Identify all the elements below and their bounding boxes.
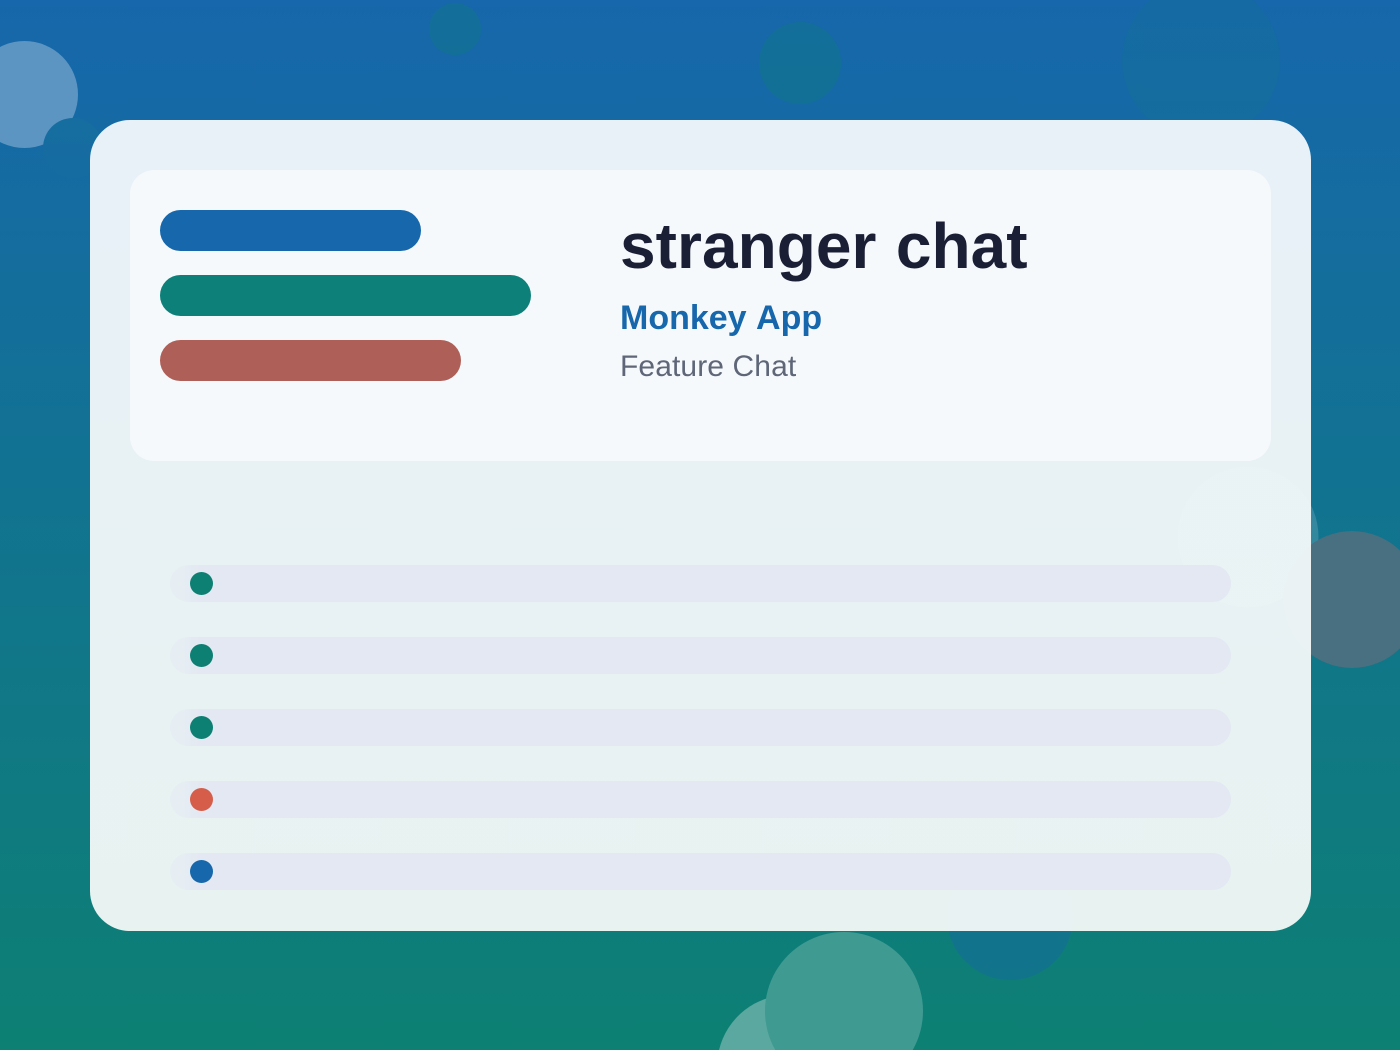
caption: Feature Chat xyxy=(620,350,796,383)
circle: bottom light xyxy=(719,995,859,1050)
list row 5 xyxy=(170,853,1231,890)
circle: top small teal xyxy=(429,3,481,55)
list row 4 xyxy=(170,781,1231,818)
circle: top medium teal xyxy=(759,22,841,104)
status dot: blue xyxy=(190,860,213,883)
bar: blue xyxy=(160,210,421,251)
list row 2 xyxy=(170,637,1231,674)
panel: main card xyxy=(90,120,1311,931)
circle: top left light xyxy=(0,41,78,148)
list row 3 xyxy=(170,709,1231,746)
title: stranger chat xyxy=(620,210,1028,282)
status dot: red xyxy=(190,788,213,811)
circle: right red xyxy=(1284,531,1400,668)
bar: red xyxy=(160,340,461,381)
list row 1 xyxy=(170,565,1231,602)
panel: header xyxy=(130,170,1271,461)
circle: top left teal xyxy=(43,118,103,178)
subtitle: Monkey App xyxy=(620,299,822,337)
status dot: teal xyxy=(190,716,213,739)
circle: right light xyxy=(1178,466,1318,608)
bar: teal xyxy=(160,275,531,316)
status dot: teal xyxy=(190,644,213,667)
status dot: teal xyxy=(190,572,213,595)
circle: top right large xyxy=(1122,0,1280,139)
circle: bottom blue xyxy=(947,854,1073,980)
circle: bottom medium xyxy=(765,932,923,1050)
